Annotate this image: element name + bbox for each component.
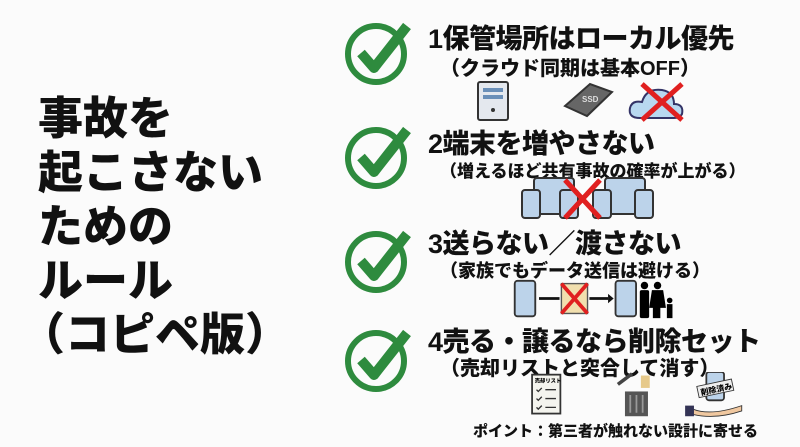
icon: check 2 [345,126,411,189]
sub 4: （売却リストと突合して消す） [440,358,719,380]
title: ルール [38,255,173,306]
title: 事故を [38,93,173,144]
icon: check 4 [345,330,411,392]
heading 4: 4売る・譲るなら削除セット [428,327,761,357]
icons row 4: 削除済み [700,381,733,398]
heading 1: 1保管場所はローカル優先 [428,24,734,54]
icons row 4 [531,372,742,417]
icon: check 1 [345,22,411,85]
sub 1: （クラウド同期は基本OFF） [440,58,700,80]
title: 起こさない [38,147,263,198]
title: ための [38,201,173,252]
icons row 3 [514,280,672,318]
icons row 1 [477,81,684,122]
sub 3: （家族でもデータ送信は避ける） [440,261,710,281]
icons row 4: 売却リスト [535,377,561,385]
title: （コピペ版） [20,309,290,360]
title [20,93,290,360]
icons row 1: SSD [582,95,599,104]
point text: ポイント：第三者が触れない設計に寄せる [473,423,758,440]
icons row 2 [521,177,654,220]
heading 2: 2端末を増やさない [428,129,655,159]
heading 3: 3送らない／渡さない [428,229,681,259]
sub 2: （増えるほど共有事故の確率が上がる） [440,162,746,181]
icon: check 3 [345,230,411,293]
